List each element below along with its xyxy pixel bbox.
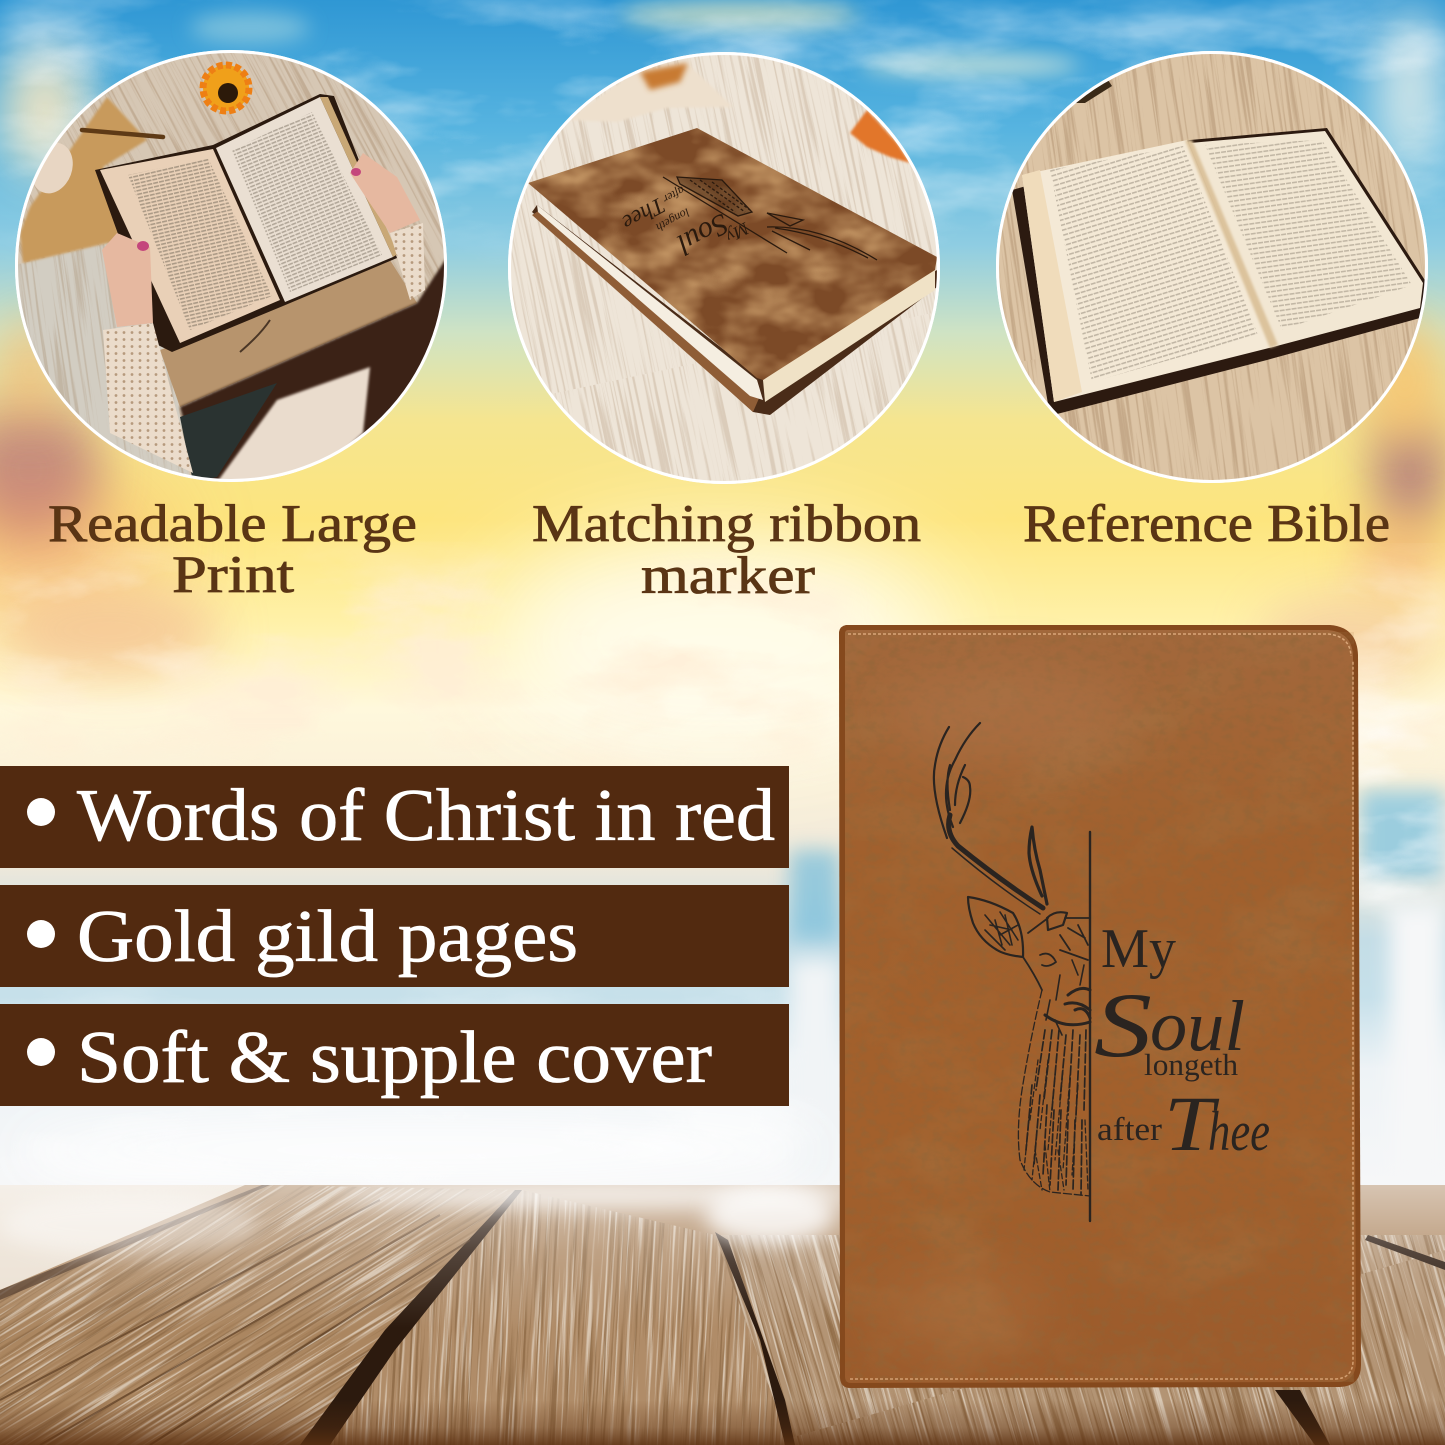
embossed lettering: My (1101, 918, 1176, 980)
burlap cloth (20, 97, 147, 263)
small embossed lettering: My (723, 218, 753, 247)
neck fur (1018, 990, 1090, 1196)
feature bar: gold gild pages (0, 885, 789, 987)
ear (968, 897, 1023, 957)
heading: readable large print: Print (172, 546, 294, 604)
panel: matching ribbon marker photo (508, 52, 940, 484)
hands and sleeves (102, 233, 153, 327)
panel: readable large print photo (15, 50, 447, 482)
embossed lettering (1094, 918, 1270, 1167)
heading: matching ribbon marker: marker (641, 547, 815, 605)
embossed lettering: oul (1150, 986, 1245, 1066)
face (1023, 918, 1090, 990)
wooden table floor (0, 1181, 1445, 1445)
embossed lettering: longeth (1144, 1047, 1238, 1082)
pen (82, 130, 163, 137)
feature bar: words of christ in red: Words of Christ in red (77, 775, 775, 857)
panel: reference bible photo (996, 51, 1428, 483)
shell (34, 143, 73, 194)
feature bar: soft and supple cover (0, 1004, 789, 1106)
pen tip (1076, 81, 1112, 103)
table (160, 260, 417, 407)
leather bible cover (839, 625, 1361, 1388)
small embossed lettering (622, 186, 749, 256)
small embossed lettering: Thee (618, 193, 669, 236)
small embossed lettering: Soul (672, 207, 734, 261)
small embossed lettering: longeth (654, 205, 692, 235)
heading: reference bible: Reference Bible (1023, 495, 1390, 553)
heading: readable large print: Readable Large (48, 495, 417, 553)
open bible (1012, 128, 1428, 414)
embossed lettering: T (1164, 1080, 1219, 1167)
heading: readable large print (48, 495, 417, 604)
embossed lettering: hee (1208, 1101, 1270, 1163)
feature bar: soft and supple cover: Soft & supple cover (77, 1017, 712, 1099)
sweater (217, 367, 370, 482)
embossed lettering: after (1097, 1112, 1162, 1148)
heading: matching ribbon marker: Matching ribbon (532, 495, 921, 553)
icon: sunflower (203, 65, 249, 111)
feature bar: words of christ in red (0, 766, 789, 868)
open book (95, 94, 397, 352)
feature bar: gold gild pages: Gold gild pages (77, 896, 578, 978)
closed brown book (532, 205, 937, 415)
small embossed deer (663, 177, 877, 260)
heading: matching ribbon marker (532, 495, 921, 605)
embossed deer (934, 723, 1090, 1221)
embossed lettering: S (1094, 974, 1152, 1076)
small embossed lettering: after (660, 183, 687, 207)
